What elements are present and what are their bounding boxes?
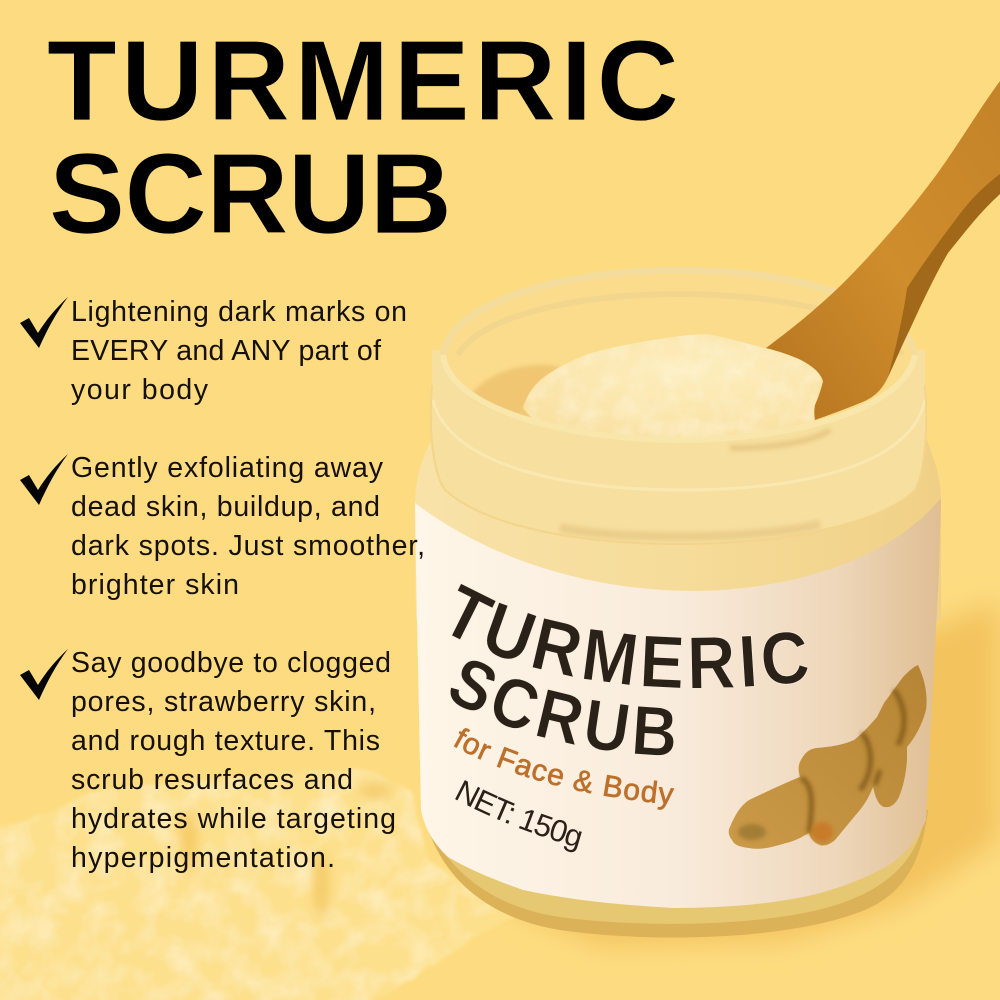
benefit text 3: and rough texture. This <box>71 725 380 757</box>
jar base scrub <box>421 800 926 924</box>
title <box>47 18 679 258</box>
jar label <box>415 498 941 908</box>
label tagline: for Face & Body <box>454 728 674 810</box>
back lip <box>443 270 915 355</box>
icon: check mark <box>20 649 68 700</box>
benefit 2 <box>20 452 425 601</box>
title line 2: SCRUB <box>49 131 452 258</box>
label net weight: NET: 150g <box>455 780 582 852</box>
benefit text 1: Lightening dark marks on <box>71 296 407 328</box>
icon: turmeric root <box>729 665 927 849</box>
wooden spoon <box>766 81 1000 420</box>
jar base <box>421 800 928 937</box>
glass collar bands <box>433 400 925 490</box>
collar lower shadow <box>560 524 820 537</box>
collar upper shadow <box>730 430 830 448</box>
benefit text 1: EVERY and ANY part of <box>71 335 381 367</box>
benefit text 3: hyperpigmentation. <box>71 842 335 874</box>
inner ring <box>458 294 902 355</box>
cavity wall shadow <box>470 365 560 420</box>
benefit text 2: dark spots. Just smoother, <box>71 530 425 562</box>
benefit text 2: Gently exfoliating away <box>71 452 384 484</box>
jar <box>415 81 1000 937</box>
benefit text 3: scrub resurfaces and <box>71 764 353 796</box>
jar shadow <box>500 600 1000 945</box>
front lip <box>443 355 915 440</box>
scrub powder pile <box>0 770 517 1000</box>
label title: TURMERIC <box>452 583 808 688</box>
benefit text 1 <box>71 296 407 406</box>
icon: check mark <box>20 297 68 348</box>
benefit text 2: brighter skin <box>71 569 239 601</box>
scrub mound <box>523 334 823 440</box>
benefit text 3: Say goodbye to clogged <box>71 647 391 679</box>
benefit text 3 <box>71 647 396 874</box>
title line 1: TURMERIC <box>47 18 679 145</box>
icon: check mark <box>20 454 68 505</box>
jar collar <box>431 350 926 544</box>
benefit 3 <box>20 647 396 874</box>
benefit text 2 <box>71 452 425 601</box>
benefit text 2: dead skin, buildup, and <box>71 491 380 523</box>
jar scrub body <box>415 436 941 620</box>
collar outline <box>431 385 926 544</box>
benefit text 1: your body <box>71 374 209 406</box>
label subtitle: SCRUB <box>450 660 674 756</box>
benefit text 3: pores, strawberry skin, <box>71 686 376 718</box>
benefit text 3: hydrates while targeting <box>71 803 396 835</box>
jar inner cavity <box>443 270 915 440</box>
benefit 1 <box>20 296 407 406</box>
